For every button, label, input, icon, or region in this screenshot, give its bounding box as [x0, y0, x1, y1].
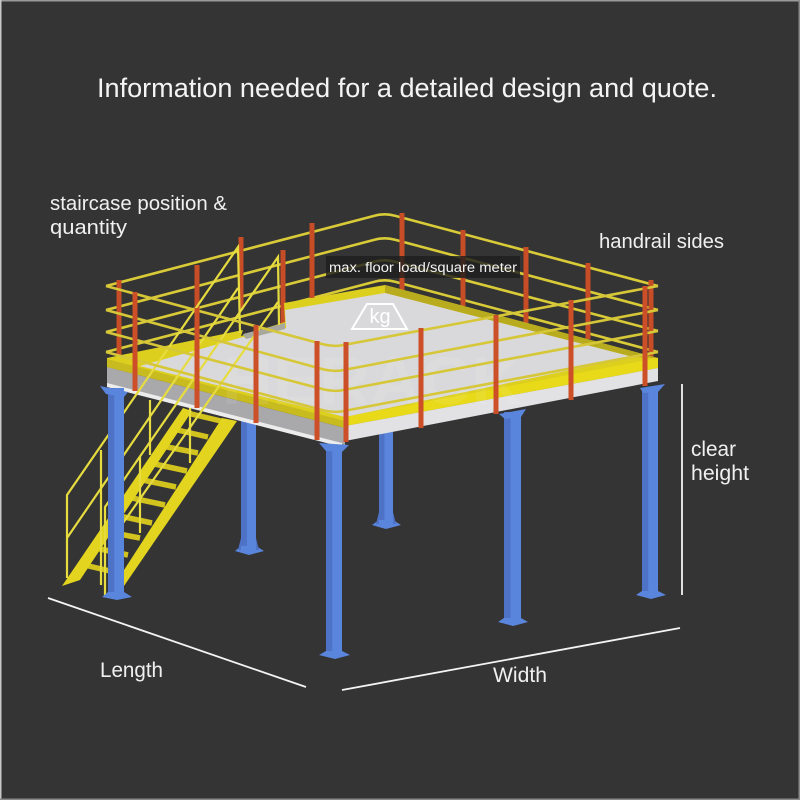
label: max floor load per square meter: max. floor load/square meter: [329, 260, 518, 275]
label: staircase position and quantity: [50, 193, 228, 239]
front left beam: [107, 367, 345, 445]
label: clear height: height: [691, 462, 749, 485]
front handrail posts: [135, 286, 645, 442]
title: Information needed for a detailed design and quote.: [97, 73, 717, 103]
icon: kg weight: [352, 304, 407, 329]
label: staircase position and quantity: quantity: [50, 217, 127, 239]
back handrails: [106, 214, 658, 352]
deck floor: [140, 293, 633, 417]
rear columns: [235, 415, 401, 555]
dimension line: clear height: [681, 384, 683, 595]
stair stringers: [124, 418, 237, 586]
icon: kg weight: kg: [369, 306, 391, 328]
label: length: Length: [100, 659, 163, 682]
stair treads: [80, 413, 221, 571]
dimension line: width: [342, 628, 680, 690]
front columns: [100, 384, 666, 659]
front right beam: [345, 368, 658, 441]
label: clear height: clear: [691, 438, 736, 461]
label: clear height: [691, 438, 749, 485]
label: handrail sides: handrail sides: [599, 231, 724, 253]
label: staircase position and quantity: staircase position &: [50, 193, 228, 215]
back handrail posts: [119, 213, 651, 358]
watermark: HERACK: [222, 343, 522, 419]
staircase: [62, 247, 279, 597]
stair rails: [67, 247, 279, 597]
mezzanine platform drawing: [62, 213, 666, 659]
label: max floor load per square meter: [326, 256, 520, 278]
dimension line: length: [48, 598, 306, 687]
platform deck: [107, 285, 658, 447]
deck edge strips: [107, 285, 658, 426]
stair opening: [243, 323, 285, 339]
front handrails: [106, 286, 658, 412]
label: width: Width: [493, 664, 547, 687]
